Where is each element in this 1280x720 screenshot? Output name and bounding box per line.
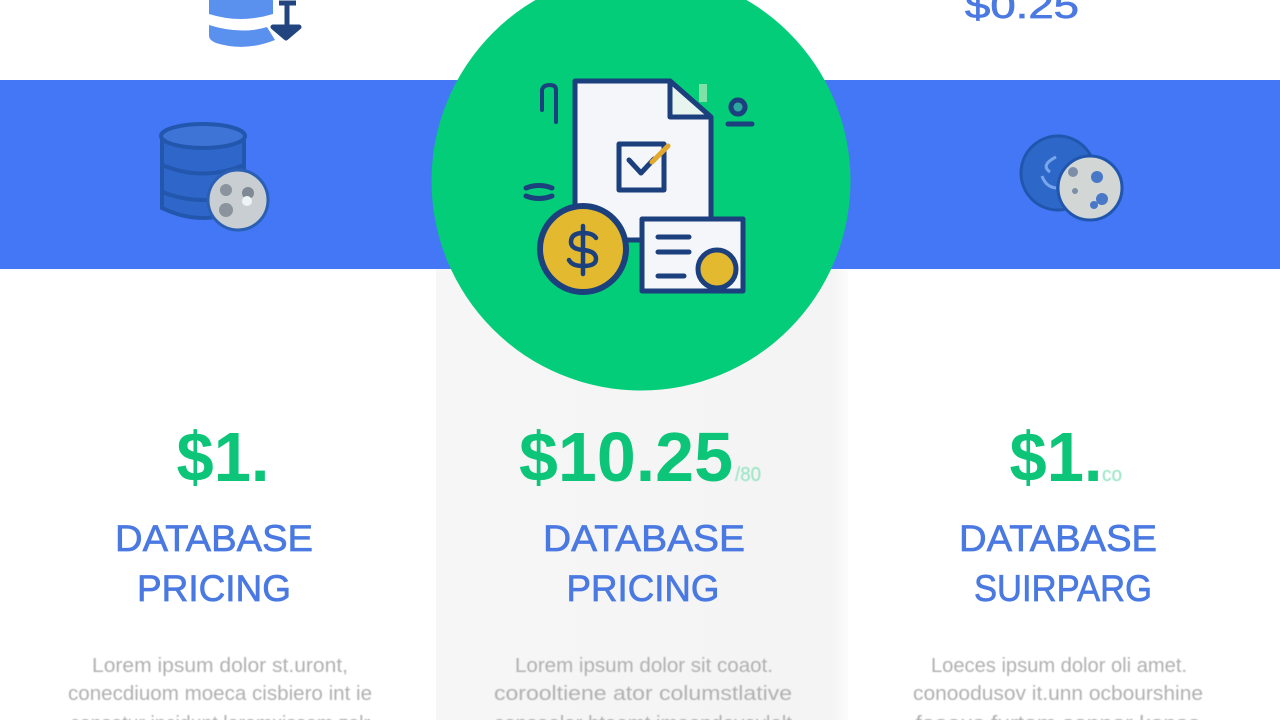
card lines <box>658 237 689 276</box>
price: $1. <box>1010 418 1102 496</box>
column 3: pricing: SUIRPARG <box>974 568 1152 609</box>
price: $1. <box>176 418 270 496</box>
green tag <box>699 84 707 102</box>
check mark <box>629 159 654 173</box>
heading: DATABASE <box>959 518 1157 559</box>
column 2: pricing: corooltiene ator columstlative <box>494 683 792 705</box>
column 2: pricing: PRICING <box>566 568 720 609</box>
column 3: pricing: co <box>1102 464 1122 486</box>
column 3: pricing: conoodusov it.unn ocbourshine <box>913 683 1203 705</box>
column 2: pricing <box>494 418 792 720</box>
icon: globe with moon <box>1021 136 1122 220</box>
column 1: pricing: conecdiuom moeca cisbiero int ie <box>68 683 372 705</box>
person <box>728 100 752 124</box>
document <box>575 81 711 240</box>
heading: DATABASE <box>115 518 313 559</box>
description: Lorem ipsum dolor sit coaot. <box>515 655 773 677</box>
icon: database with arrow, partly cropped at top <box>209 0 299 47</box>
description: Loeces ipsum dolor oli amet. <box>931 655 1187 677</box>
column 1: pricing <box>68 418 372 720</box>
green circle <box>432 0 850 390</box>
check mark tip <box>652 146 668 162</box>
squiggles <box>526 186 552 198</box>
icon: database with moon <box>161 124 268 230</box>
column 2: pricing: /80 <box>735 464 761 486</box>
heading: DATABASE <box>543 518 745 559</box>
icon: document with checkbox, coin and card <box>526 81 752 292</box>
document fold <box>670 81 711 117</box>
price: $10.25 <box>519 418 733 496</box>
column 1: pricing: PRICING <box>137 568 291 609</box>
dollar glyph <box>569 226 596 274</box>
panel: centre column background <box>436 268 848 720</box>
description: Lorem ipsum dolor st.uront, <box>92 655 348 677</box>
checkbox <box>619 144 664 190</box>
paperclip <box>542 85 556 122</box>
coin <box>540 206 626 292</box>
column 3: pricing <box>913 418 1203 720</box>
card <box>642 219 743 291</box>
seal <box>698 250 736 288</box>
blue band <box>0 80 1280 269</box>
